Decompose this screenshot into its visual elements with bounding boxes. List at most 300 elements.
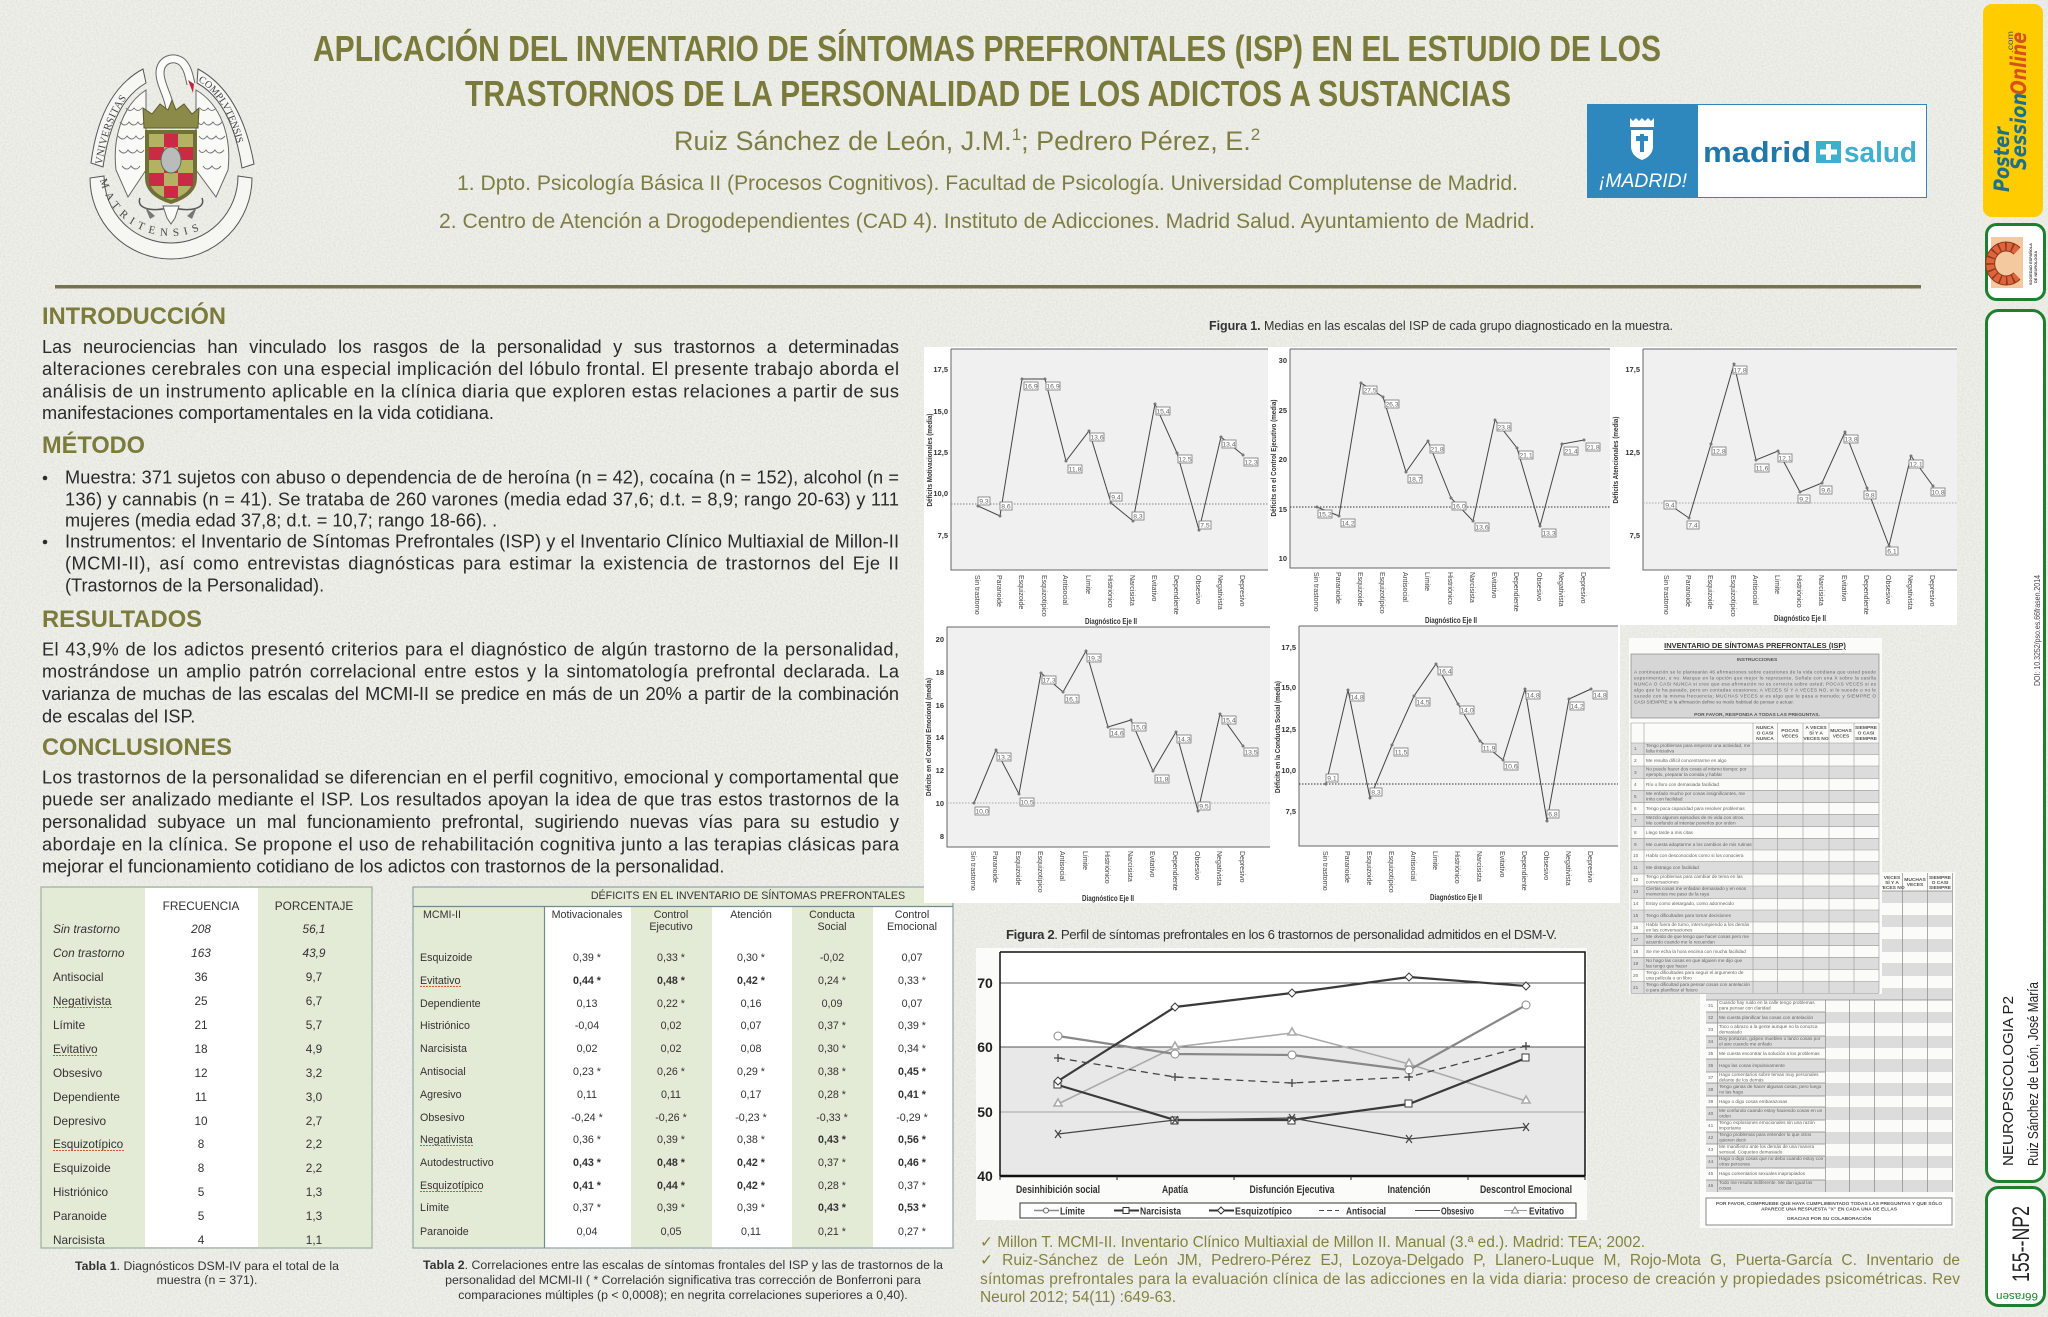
sidebar: PosterSessionOnline badge: Session [2007, 93, 2031, 170]
chart: déficits en el control emocional: 11,8 [1156, 776, 1169, 784]
chart: déficits en el control ejecutivo: 21,8 [1586, 444, 1600, 452]
questionnaire: ISP page 1: POR FAVOR, RESPONDA A TODAS LAS PREGUNTAS. [1694, 712, 1821, 718]
chart: déficits en el control emocional: 10 [936, 799, 944, 808]
table 1: diagnósticos: 56,1 [303, 922, 325, 936]
chart: déficits atencionales: 7,4 [1688, 522, 1698, 530]
caption: tabla 1 [75, 1259, 339, 1287]
chart: déficits en el control ejecutivo: 14,2 [1341, 520, 1355, 528]
table 1: diagnósticos: 3,2 [306, 1066, 322, 1080]
sidebar: PosterSessionOnline badge [1983, 4, 2043, 217]
text block: método: (MCMI-II), así como entrevistas diagnósticas para estimar la existencia de trastornos del Eje II [65, 554, 899, 574]
sidebar: brain society logo: DE NEUROLOGÍA [2033, 251, 2038, 283]
table 1: diagnósticos: 2,7 [306, 1114, 322, 1128]
chart: déficits en el control ejecutivo: Obsesivo [1535, 572, 1542, 601]
table 2: correlaciones: Evitativo [420, 975, 460, 987]
questionnaire: ISP page 2: demasiado [1719, 1030, 1742, 1034]
questionnaire: ISP page 1: NUNCA [1756, 736, 1774, 742]
chart: déficits motivacionales: 16,9 [1046, 384, 1060, 390]
legend [1020, 1203, 1576, 1218]
table 2: correlaciones: Control [654, 909, 688, 921]
table 1: diagnósticos: Obsesivo [53, 1066, 103, 1080]
questionnaire: ISP page 1: 14 [1633, 901, 1639, 906]
table 2: correlaciones: MCMI-II [423, 909, 461, 921]
series: Evitativo [1054, 1028, 1530, 1106]
questionnaire: ISP page 1 [1629, 638, 1882, 994]
table 2: correlaciones: Negativista [420, 1134, 473, 1146]
questionnaire: ISP page 1: NUNCA O CASI NUNCA si cree que esa afirmación no es correcta sobre usted; POCAS VECES si es [1634, 682, 1877, 686]
chart: déficits en el control emocional: Paranoide [991, 851, 998, 883]
text block: introducción: análisis de un instrumento aplicable en la clínica diaria que exploren estas relaciones a partir de sus [42, 382, 899, 402]
questionnaire: ISP page 1: O CASI [1757, 730, 1774, 736]
table 1: diagnósticos: 4 [198, 1233, 205, 1247]
table 2: correlaciones: 0,39 * [657, 1134, 685, 1146]
questionnaire: ISP page 2: 40 [1708, 1111, 1714, 1116]
authors: ; Pedrero Pérez, E. [1021, 126, 1251, 156]
legend: Evitativo [1529, 1206, 1564, 1218]
logo: Madrid Salud: salud [1844, 137, 1917, 169]
chart: déficits en la conducta social: 12,5 [1281, 725, 1296, 734]
questionnaire: ISP page 2: Hago comentarios sexuales inapropiados [1719, 1171, 1806, 1176]
chart: déficits atencionales: 17,5 [1625, 365, 1640, 374]
questionnaire: ISP page 1: 8 [1634, 830, 1637, 835]
chart: figura 2 perfil de síntomas: 50 [977, 1104, 993, 1120]
table 2: correlaciones: 0,28 * [818, 1089, 846, 1101]
questionnaire: ISP page 1: irrito con facilidad [1646, 796, 1683, 802]
text block: introducción: alteraciones cerebrales con una especial implicación del lóbulo frontal. El presente trabajo aborda el [42, 359, 899, 379]
chart: déficits en el control ejecutivo: Esquizoide [1356, 572, 1363, 606]
questionnaire: ISP page 2: Hago o digo cosas embarazosas [1719, 1099, 1788, 1104]
questionnaire: ISP page 2: 45 [1708, 1171, 1714, 1176]
table 2: correlaciones: 0,37 * [573, 1202, 601, 1214]
questionnaire: ISP page 2: el aire cuando me enfado [1719, 1042, 1772, 1046]
chart: déficits en la conducta social: 6,8 [1548, 812, 1558, 818]
text block: método: (Trastornos de la Personalidad). [65, 576, 324, 596]
table 2: correlaciones: 0,27 * [898, 1226, 926, 1238]
questionnaire: ISP page 2: delante de los demás [1719, 1078, 1764, 1082]
questionnaire: ISP page 2: Doy portazos, golpeo muebles o lanzo cosas por [1719, 1036, 1821, 1041]
chart: déficits en el control ejecutivo: 21,1 [1519, 452, 1533, 460]
table 2: correlaciones: 0,56 * [898, 1134, 927, 1146]
chart: déficits en el control ejecutivo: Depresivo [1579, 572, 1586, 604]
chart: déficits en el control ejecutivo: Antisocial [1401, 572, 1408, 602]
chart: déficits en el control ejecutivo: 23,8 [1497, 424, 1511, 432]
chart: déficits motivacionales: Histriónico [1106, 575, 1113, 608]
chart: déficits atencionales: 7,5 [1630, 531, 1640, 540]
questionnaire: ISP page 2: 36 [1708, 1063, 1714, 1068]
x axis labels: Disfunción Ejecutiva [1250, 1184, 1335, 1196]
questionnaire: ISP page 2: 35 [1708, 1051, 1714, 1056]
table 2: correlaciones: -0,04 [575, 1020, 599, 1032]
chart: déficits en el control ejecutivo: 26,3 [1385, 402, 1399, 408]
table 2: correlaciones: 0,39 * [657, 1202, 685, 1214]
table 1: diagnósticos: FRECUENCIA [163, 899, 239, 913]
chart: déficits motivacionales: Diagnóstico Eje II [1085, 617, 1137, 626]
chart: déficits en la conducta social: Sin trastorno [1321, 851, 1328, 891]
table 2: correlaciones: Dependiente [420, 998, 481, 1010]
questionnaire: ISP page 1: Me olvido de que tengo que hacer cosas pero me [1646, 934, 1749, 939]
chart: déficits atencionales: 9,6 [1821, 488, 1831, 494]
chart: déficits motivacionales: 9,4 [1111, 494, 1121, 502]
text block: conclusiones: puede ser analizado mediante el ISP. Los resultados apoyan la idea de que tras estos trastornos de la [42, 790, 900, 810]
table 1: diagnósticos: PORCENTAJE [275, 899, 353, 913]
table 1: diagnósticos: Depresivo [53, 1114, 107, 1128]
chart: déficits motivacionales: Obsesivo [1194, 575, 1201, 604]
table 1: diagnósticos: Esquizotípico [53, 1137, 124, 1151]
chart: déficits en el control emocional: Histriónico [1103, 851, 1110, 884]
questionnaire: ISP page 2: para pensar con claridad [1719, 1006, 1771, 1010]
table 2: correlaciones: 0,23 * [573, 1066, 601, 1078]
chart: déficits en el control emocional: Narcisista [1126, 851, 1133, 882]
chart: déficits atencionales: 11,6 [1756, 466, 1769, 472]
table 1: diagnósticos: 6,7 [306, 994, 322, 1008]
chart: déficits en la conducta social: 14,8 [1350, 694, 1364, 702]
chart: déficits en la conducta social: 16,4 [1438, 668, 1452, 676]
caption: tabla 2: Tabla 2. Correlaciones entre las escalas de síntomas frontales del ISP y las de trastornos de la [423, 1258, 943, 1272]
table 2: correlaciones: Esquizoide [420, 952, 472, 964]
table 2: correlaciones: 0,22 * [657, 998, 685, 1010]
x axis labels: Descontrol Emocional [1480, 1184, 1572, 1196]
chart: déficits en la conducta social: 10,6 [1504, 764, 1518, 770]
questionnaire: ISP page 2: APARECE UNA RESPUESTA "X" EN CADA UNA DE ELLAS [1761, 1206, 1898, 1212]
chart: déficits motivacionales: Esquizotípico [1040, 575, 1047, 617]
questionnaire: ISP page 2: Me confundo cuando estoy haciendo cosas en un [1719, 1108, 1823, 1113]
chart: déficits en el control ejecutivo: 13,3 [1542, 530, 1556, 538]
table 1: diagnósticos: 43,9 [303, 946, 326, 960]
chart: déficits atencionales: Depresivo [1928, 575, 1935, 607]
table 1: diagnósticos: 8 [198, 1161, 205, 1175]
questionnaire: ISP page 2: Me cuesta planificar las cosas con antelación [1719, 1015, 1813, 1020]
sidebar: poster code box [1986, 1188, 2044, 1306]
questionnaire: ISP page 2: Toco o abrazo a la gente aunque no la conozca [1719, 1024, 1818, 1029]
caption: tabla 1: muestra (n = 371). [157, 1273, 257, 1287]
table 2: correlaciones: 0,45 * [898, 1066, 927, 1078]
chart: déficits en el control emocional: Sin trastorno [969, 851, 976, 891]
chart: déficits motivacionales: 7,5 [938, 531, 948, 540]
sidebar: brain society logo: SOCIEDAD ESPAÑOLA [2028, 243, 2033, 285]
chart: déficits en la conducta social: Diagnóstico Eje II [1430, 893, 1482, 902]
chart: déficits motivacionales: 10,0 [933, 489, 948, 498]
chart: déficits atencionales: Evitativo [1840, 575, 1847, 602]
sidebar: session information box: NEUROPSICOLOGIA P2 [2000, 996, 2017, 1166]
questionnaire: ISP page 1: 21 [1633, 985, 1639, 990]
questionnaire: ISP page 1: 10 [1633, 853, 1639, 858]
caption: tabla 2: comparaciones múltiples (p < 0,0008); en negrita correlaciones superiores a 0,40). [458, 1288, 908, 1302]
chart: déficits en la conducta social: Límite [1431, 851, 1438, 870]
references: Neurol 2012; 54(11) :649-63. [980, 1289, 1176, 1306]
chart: déficits motivacionales: 8,3 [1133, 514, 1143, 520]
chart: déficits motivacionales: Déficits Motivacionales (media) [925, 413, 934, 506]
chart: déficits en el control emocional: 18 [936, 668, 944, 677]
questionnaire: ISP page 2: 38 [1708, 1087, 1714, 1092]
chart: déficits en la conducta social: Antisocial [1409, 851, 1416, 881]
questionnaire: ISP page 2: VECES NO [1879, 885, 1905, 891]
references: ✓ Millon T. MCMI-II. Inventario Clínico Multiaxial de Millon II. Manual (3.ª ed.). Madrid: TEA; 2002. [980, 1234, 1645, 1251]
table 2: correlaciones: 0,09 [822, 998, 842, 1010]
questionnaire: ISP page 1: 4 [1634, 782, 1637, 787]
caption: figura 2: Figura 2. Perfil de síntomas prefrontales en los 6 trastornos de personalidad admitidos en el DSM-V. [1006, 927, 1557, 942]
questionnaire: ISP page 1: Hablo con desconocidos como si los conociera [1646, 853, 1744, 858]
questionnaire: ISP page 1: 12 [1633, 877, 1639, 882]
x axis labels: Inatención [1388, 1184, 1431, 1196]
questionnaire: ISP page 1: 13 [1633, 889, 1639, 894]
table 2: correlaciones: 0,41 * [573, 1180, 602, 1192]
chart: déficits en el control emocional: Diagnóstico Eje II [1082, 894, 1134, 903]
table 1: diagnósticos: Esquizoide [53, 1161, 111, 1175]
authors: Ruiz Sánchez de León, J.M. [674, 126, 1012, 156]
questionnaire: ISP page 1: NUNCA [1756, 725, 1774, 731]
series: Límite [1054, 1001, 1530, 1074]
questionnaire: ISP page 1: MUCHAS [1830, 728, 1852, 734]
authors [674, 125, 1260, 156]
chart: déficits atencionales: 6,1 [1887, 548, 1897, 556]
table 2: correlaciones: 0,53 * [898, 1202, 927, 1214]
table 2: correlaciones: 0,11 [661, 1089, 681, 1101]
questionnaire: ISP page 1: A VECES [1805, 725, 1827, 731]
chart: déficits en el control ejecutivo: Evitativo [1490, 572, 1497, 599]
chart: déficits motivacionales: 8,6 [1001, 504, 1011, 510]
table 1: diagnósticos: 21 [194, 1018, 208, 1032]
chart: déficits atencionales: Narcisista [1817, 575, 1824, 606]
chart: déficits atencionales: Esquizoide [1706, 575, 1713, 609]
questionnaire: ISP page 1: 15 [1633, 913, 1639, 918]
questionnaire: ISP page 1: 16 [1633, 925, 1639, 930]
questionnaire: ISP page 1: acuerdo cuando me lo recuerdan [1646, 940, 1715, 944]
chart: déficits en el control emocional: 17,3 [1042, 678, 1056, 684]
text block: resultados: El 43,9% de los adictos presentó criterios para el diagnóstico de algún trastorno de la personalidad, [42, 640, 899, 660]
table 2: correlaciones: 0,07 [741, 1020, 761, 1032]
questionnaire: ISP page 2: 39 [1708, 1099, 1714, 1104]
table 2: correlaciones: Autodestructivo [420, 1157, 494, 1169]
table 1: diagnósticos: Histriónico [53, 1185, 109, 1199]
table 2: correlaciones: 0,48 * [657, 975, 686, 987]
chart: déficits motivacionales: 12,5 [1178, 456, 1192, 464]
table 1: diagnósticos: Con trastorno [53, 946, 125, 960]
questionnaire: ISP page 1: Tengo problemas para empezar una actividad, me [1646, 743, 1751, 748]
table 2: correlaciones: Conducta [809, 909, 855, 921]
table 2: correlaciones: 0,08 [741, 1043, 761, 1055]
chart: déficits en el control emocional: 9,5 [1199, 804, 1209, 810]
chart: déficits en el control ejecutivo: Esquizotípico [1378, 572, 1385, 614]
questionnaire: ISP page 2: VECES [1907, 882, 1924, 888]
chart: déficits atencionales: Diagnóstico Eje II [1774, 614, 1826, 623]
questionnaire: ISP page 1: 17 [1633, 937, 1639, 942]
questionnaire: ISP page 2: 42 [1708, 1135, 1714, 1140]
table 1: diagnósticos: 208 [190, 922, 211, 936]
chart: déficits motivacionales: 11,8 [1069, 466, 1082, 474]
chart: déficits en el control emocional [924, 627, 1270, 903]
sidebar: session information box: Ruiz Sánchez de León, José María [2025, 981, 2042, 1166]
questionnaire: ISP page 1: CASI SIEMPRE si la afirmación define su modo habitual de pensar o actuar. [1634, 700, 1794, 704]
table 2: correlaciones: -0,23 * [735, 1112, 767, 1124]
table 2: correlaciones: Antisocial [420, 1066, 466, 1078]
text block: conclusiones [42, 768, 900, 876]
table 2: correlaciones: 0,34 * [898, 1043, 926, 1055]
chart: déficits atencionales: 12,1 [1778, 456, 1792, 462]
table 2: correlaciones: 0,39 * [737, 1202, 765, 1214]
questionnaire: ISP page 1: 7 [1634, 818, 1637, 823]
chart: déficits en el control emocional: Esquizotípico [1036, 851, 1043, 893]
references: ✓ Ruiz-Sánchez de León JM, Pedrero-Pérez EJ, Lozoya-Delgado P, Llanero-Luque M, Rojo-Mota G, Puerta-García C. Inventario de [980, 1252, 1960, 1269]
table 2: correlaciones: 0,11 [577, 1089, 597, 1101]
x axis labels: Desinhibición social [1016, 1184, 1100, 1196]
table 1: diagnósticos: 36 [194, 970, 208, 984]
chart: déficits motivacionales: 12,5 [933, 448, 948, 457]
chart: déficits en el control ejecutivo: Déficits en el Control Ejecutivo (media) [1269, 399, 1278, 516]
questionnaire: ISP page 1: SIEMPRE [1855, 736, 1878, 742]
chart: déficits motivacionales: 7,5 [1200, 522, 1210, 530]
questionnaire: ISP page 1: Tengo problemas para cambiar de tema en las [1646, 874, 1743, 879]
table 2: correlaciones: 0,36 * [573, 1134, 601, 1146]
questionnaire: ISP page 1: INSTRUCCIONES [1737, 657, 1778, 663]
chart: déficits atencionales: 12,5 [1625, 448, 1640, 457]
table 2: correlaciones [413, 887, 953, 1248]
questionnaire: ISP page 1: 9 [1634, 842, 1637, 847]
chart: déficits atencionales: 9,2 [1799, 496, 1809, 504]
chart: déficits en el control ejecutivo [1269, 349, 1610, 625]
questionnaire: ISP page 1: Llego tarde a mis citas [1646, 830, 1694, 835]
chart: déficits en el control ejecutivo: 30 [1279, 356, 1287, 365]
chart: déficits en el control emocional: 14 [936, 733, 945, 742]
questionnaire: ISP page 1: en las conversaciones [1646, 928, 1693, 932]
chart: déficits en el control ejecutivo: Sin trastorno [1312, 572, 1319, 612]
table 2: correlaciones: 0,44 * [657, 1180, 686, 1192]
text block: resultados: mostrándose un amplio patrón correlacional entre estos y la sintomatología prefrontal declarada. La [42, 662, 900, 682]
questionnaire: ISP page 1: No puedo hacer dos cosas al mismo tiempo: por [1646, 766, 1747, 772]
questionnaire: ISP page 1: Me confundo al intentar ponerlos por orden [1646, 820, 1736, 826]
chart: déficits motivacionales: 13,6 [1090, 434, 1104, 442]
caption: figura 1: Figura 1. Medias en las escalas del ISP de cada grupo diagnosticado en la muestra. [1209, 319, 1673, 333]
chart: déficits en la conducta social: Déficits en la Conducta Social (media) [1273, 681, 1282, 793]
chart: déficits en el control emocional: Obsesivo [1193, 851, 1200, 880]
text block: resultados: de escalas del ISP. [42, 706, 195, 726]
chart: déficits en la conducta social: 15,0 [1281, 683, 1296, 692]
questionnaire: ISP page 2: 41 [1708, 1123, 1714, 1128]
table 2: correlaciones: -0,26 * [655, 1112, 687, 1124]
chart: déficits en la conducta social: Obsesivo [1542, 851, 1549, 880]
questionnaire: ISP page 2: sensual. Coqueteo demasiado [1719, 1150, 1783, 1154]
chart: déficits atencionales: 12,8 [1712, 448, 1726, 456]
chart: déficits en el control emocional: 15,4 [1222, 718, 1236, 724]
questionnaire: ISP page 1: Ciertas cosas me enfadan demasiado y en esos [1646, 886, 1747, 891]
questionnaire: ISP page 1: momentos me paso de la raya [1646, 892, 1709, 896]
questionnaire: ISP page 2: SIEMPRE [1929, 885, 1952, 891]
table 2: correlaciones: Agresivo [420, 1089, 462, 1101]
questionnaire: ISP page 2: VECES [1884, 875, 1901, 881]
questionnaire: ISP page 2: Hago o digo cosas que no debo cuando estoy con [1719, 1156, 1824, 1161]
table 1: diagnósticos: 1,3 [306, 1209, 323, 1223]
text block: método: Instrumentos: el Inventario de Síntomas Prefrontales (ISP) y el Inventario Clínico Multiaxial de Millon-II [65, 532, 899, 552]
sidebar: brain society logo [1986, 224, 2044, 300]
questionnaire: ISP page 1: Hablo fuera de turno, interrumpiendo a los demás [1646, 922, 1750, 927]
chart: déficits en el control ejecutivo: 13,6 [1475, 524, 1489, 532]
chart: déficits en el control ejecutivo: 25 [1279, 406, 1287, 415]
text block: introducción: manifestaciones comportamentales en la vida cotidiana. [42, 403, 494, 423]
questionnaire: ISP page 1: VECES [1833, 734, 1850, 740]
questionnaire: ISP page 2: 31 [1708, 1003, 1714, 1008]
table 2: correlaciones: 0,37 * [898, 1180, 926, 1192]
legend: Narcisista [1140, 1206, 1181, 1218]
questionnaire: ISP page 1: Tengo dificultades para seguir el argumento de [1646, 970, 1744, 975]
table 2: correlaciones: Ejecutivo [649, 921, 693, 933]
chart: déficits atencionales: 17,8 [1733, 368, 1747, 374]
chart: déficits atencionales: Obsesivo [1884, 575, 1891, 604]
chart: déficits motivacionales: 13,4 [1222, 442, 1236, 448]
text block: introducción: Las neurociencias han vinculado los rasgos de la personalidad y sus trastornos a determinadas [42, 337, 899, 357]
text block: resultados [42, 640, 900, 726]
questionnaire: ISP page 2: 33 [1708, 1027, 1714, 1032]
chart: déficits motivacionales: Dependiente [1172, 575, 1179, 615]
chart: déficits motivacionales: Evitativo [1150, 575, 1157, 602]
sidebar: PosterSessionOnline badge: Online [2007, 32, 2031, 95]
heading: resultados: RESULTADOS [42, 606, 202, 633]
table 1: diagnósticos: 2,2 [306, 1137, 322, 1151]
sidebar: session information box: DOI: 10.3252/pso.es.66frasen.2014 [2033, 575, 2042, 686]
table 2: correlaciones: 0,26 * [657, 1066, 685, 1078]
chart: déficits atencionales: 9,8 [1865, 492, 1875, 500]
chart: déficits atencionales: 12,1 [1909, 462, 1923, 468]
chart: déficits en la conducta social: 14,8 [1526, 692, 1540, 700]
questionnaire: ISP page 2: quieren decir [1719, 1138, 1747, 1142]
table 1: diagnósticos: 12 [194, 1066, 208, 1080]
table 2: correlaciones: 0,28 * [818, 1180, 846, 1192]
chart: déficits en la conducta social: Evitativo [1498, 851, 1505, 878]
table 2: correlaciones: 0,43 * [818, 1134, 847, 1146]
chart: déficits motivacionales: 15,0 [933, 407, 948, 416]
questionnaire: ISP page 2: Tengo ganas de hacer algunas cosas, pero luego [1719, 1084, 1822, 1089]
table 2: correlaciones: 0,02 [577, 1043, 597, 1055]
legend: Obsesivo [1441, 1206, 1474, 1218]
title: TRASTORNOS DE LA PERSONALIDAD DE LOS ADICTOS A SUSTANCIAS [465, 73, 1511, 114]
table 2: correlaciones: Narcisista [420, 1043, 467, 1055]
table 2: correlaciones: -0,33 * [816, 1112, 848, 1124]
chart: déficits en la conducta social: Esquizotípico [1387, 851, 1394, 893]
chart: déficits en la conducta social: 9,1 [1327, 776, 1337, 782]
table 2: correlaciones: 0,37 * [818, 1020, 846, 1032]
questionnaire: ISP page 2: Tengo problemas para entender lo que otros [1719, 1132, 1812, 1137]
questionnaire: ISP page 1: 18 [1633, 949, 1639, 954]
questionnaire: ISP page 1: 3 [1634, 770, 1637, 775]
questionnaire: ISP page 1: 6 [1634, 806, 1637, 811]
table 1: diagnósticos: 10 [194, 1114, 208, 1128]
table 2: correlaciones: 0,24 * [818, 975, 846, 987]
questionnaire: ISP page 1: No hago las cosas en que alguien me dijo que [1646, 958, 1743, 963]
table 2: correlaciones: 0,39 * [898, 1020, 926, 1032]
chart: déficits motivacionales: Paranoide [995, 575, 1002, 607]
table 2: correlaciones: 0,48 * [657, 1157, 686, 1169]
table 2: correlaciones: 0,37 * [818, 1157, 846, 1169]
chart: déficits en la conducta social: Narcisista [1475, 851, 1482, 882]
chart: déficits atencionales [1611, 349, 1957, 623]
chart: déficits atencionales: Antisocial [1751, 575, 1758, 605]
table 1: diagnósticos: Antisocial [53, 970, 104, 984]
questionnaire: ISP page 1: 19 [1633, 961, 1639, 966]
questionnaire: ISP page 1: Mezclo algunos episodios de mi vida con otros. [1646, 815, 1744, 820]
series: Antisocial [1054, 1042, 1530, 1087]
chart: déficits motivacionales [925, 349, 1268, 626]
chart: déficits atencionales: Déficits Atencionales (media) [1611, 416, 1620, 504]
table 1: diagnósticos [41, 887, 372, 1248]
chart: déficits en el control ejecutivo: Negativista [1557, 572, 1564, 607]
chart: déficits motivacionales: Depresivo [1238, 575, 1245, 607]
chart: déficits en el control ejecutivo: Histriónico [1446, 572, 1453, 605]
table 2: correlaciones: -0,29 * [896, 1112, 928, 1124]
chart: déficits en la conducta social: Dependiente [1520, 851, 1527, 891]
text block: método: mujeres (media edad 37,8; d.t. = 10,7; rango 18-66). . [65, 510, 497, 530]
chart: déficits en el control emocional: Depresivo [1238, 851, 1245, 883]
questionnaire: ISP page 2: SIEMPRE [1929, 875, 1952, 881]
legend: Límite [1060, 1206, 1085, 1218]
chart: déficits motivacionales: Límite [1084, 575, 1091, 594]
